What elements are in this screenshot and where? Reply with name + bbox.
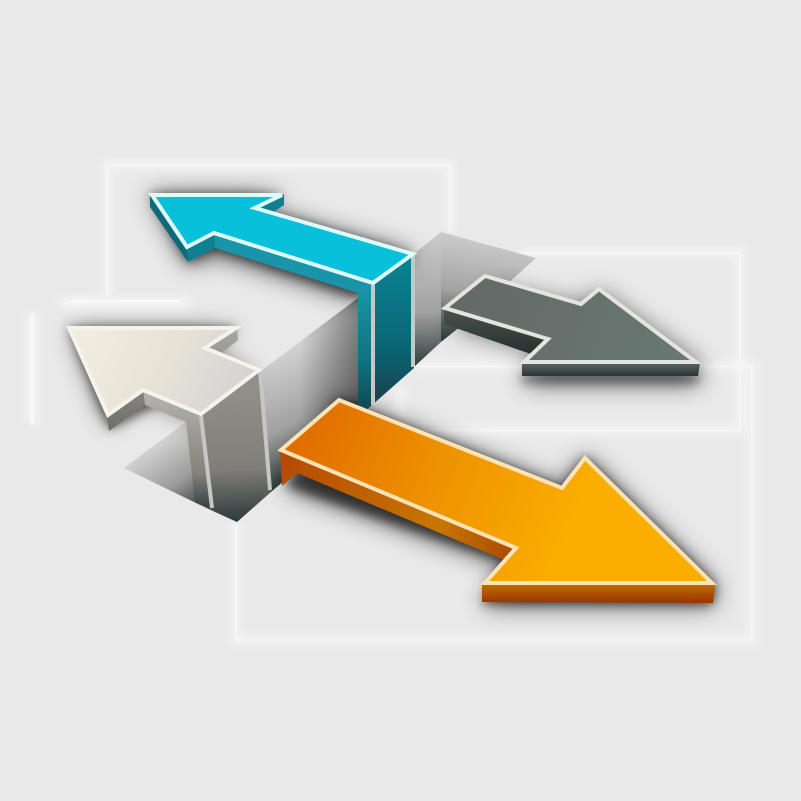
frame: right panel outline [400, 253, 740, 430]
shadow: teal arrow [150, 194, 414, 300]
orange arrow top face [281, 400, 712, 583]
arrow: orange [280, 400, 715, 603]
beige column right face [201, 371, 271, 522]
beige column left face [143, 390, 213, 511]
frame: left panel outline [32, 301, 190, 424]
beige column edges [201, 371, 270, 508]
orange shaft side [280, 450, 516, 560]
shadow: beige arrow [68, 327, 255, 430]
teal shaft and column left face [214, 233, 373, 412]
crack: wall behind the dark grey arrow [415, 232, 536, 366]
beige arrow extruded edges [205, 327, 238, 357]
teal column edges [373, 256, 413, 405]
shadow: dark grey arrow [450, 290, 700, 384]
frame: lower panel outline [236, 366, 752, 640]
frame: top-left panel outline [107, 165, 450, 295]
teal arrow top face [152, 195, 413, 283]
grey arrowhead front side [522, 363, 700, 376]
crack: central wall [262, 298, 372, 492]
grey arrow top face [445, 276, 696, 362]
beige arrow top face [69, 328, 259, 415]
teal column right face [372, 254, 414, 405]
crack: pit under the beige arrow [124, 422, 237, 522]
arrow: teal [150, 194, 414, 412]
teal arrow extruded edges [150, 194, 188, 262]
shadow: orange arrow [285, 399, 715, 606]
arrow: beige [69, 327, 271, 522]
orange arrowhead front side [482, 584, 715, 603]
arrow: dark grey [444, 276, 700, 376]
grey shaft side [444, 308, 548, 354]
